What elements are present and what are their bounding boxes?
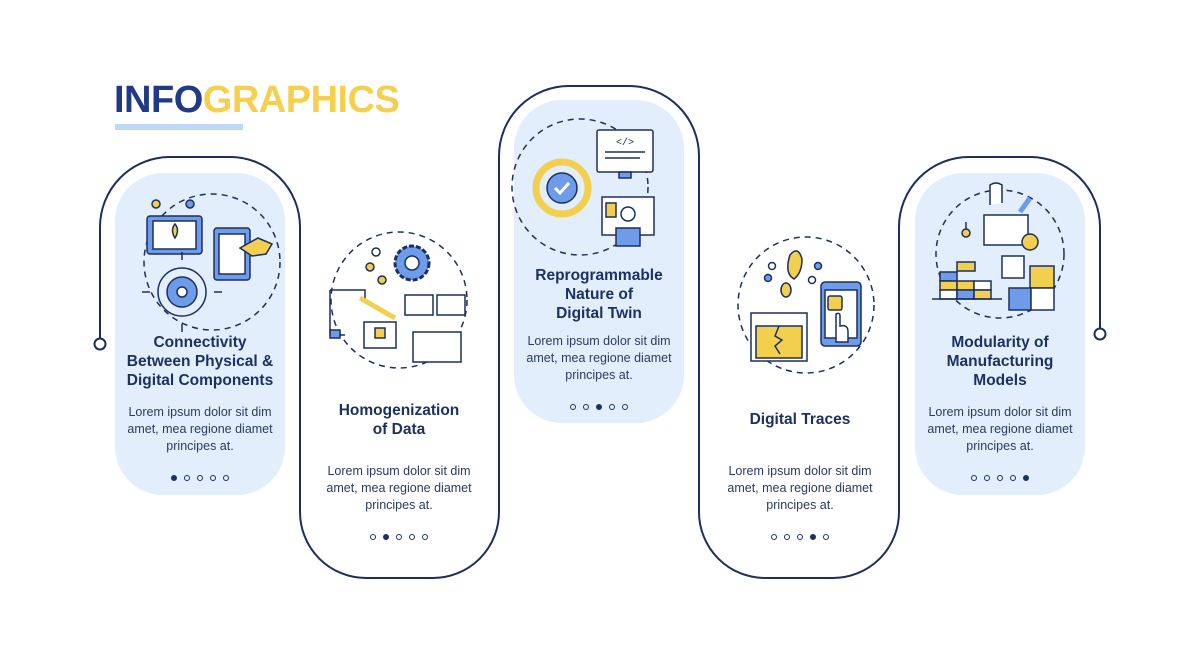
body 2: Lorem ipsum dolor sit dim — [327, 464, 471, 478]
heading 3: Nature of — [565, 286, 633, 303]
heading 5: Modularity of — [951, 334, 1049, 351]
body 1: Lorem ipsum dolor sit dim — [128, 405, 272, 419]
body 1: principes at. — [166, 439, 234, 453]
title underline — [115, 124, 243, 130]
panel 4 text — [727, 411, 873, 540]
body 4: amet, mea regione diamet — [727, 481, 873, 495]
heading 5: Models — [973, 372, 1027, 389]
heading 5: Manufacturing — [947, 353, 1053, 370]
heading 1: Connectivity — [153, 334, 246, 351]
icon: reprogrammable: </> — [616, 137, 634, 149]
end node — [1094, 328, 1106, 340]
panel 1 fill — [115, 173, 285, 495]
panel 5 fill — [915, 173, 1085, 495]
panel 2 text — [326, 402, 472, 540]
heading 2: Homogenization — [339, 402, 459, 419]
icon: modularity — [932, 183, 1064, 318]
body 2: principes at. — [365, 498, 433, 512]
body 5 — [927, 405, 1073, 453]
heading 3 — [535, 267, 663, 322]
body 4: principes at. — [766, 498, 834, 512]
start node — [94, 338, 106, 350]
heading 1 — [127, 334, 273, 389]
body 1 — [127, 405, 273, 453]
body 2: amet, mea regione diamet — [326, 481, 472, 495]
icon: connectivity — [142, 194, 280, 332]
panel 3 text — [526, 267, 672, 410]
body 3: Lorem ipsum dolor sit dim — [527, 334, 671, 348]
body 3: amet, mea regione diamet — [526, 351, 672, 365]
body 5: amet, mea regione diamet — [927, 422, 1073, 436]
heading 4: Digital Traces — [750, 411, 850, 428]
panel 5 text — [927, 334, 1073, 481]
heading 1: Between Physical & — [127, 353, 273, 370]
body 2 — [326, 464, 472, 512]
dots 2 — [370, 534, 428, 540]
body 5: Lorem ipsum dolor sit dim — [928, 405, 1072, 419]
heading 5 — [947, 334, 1053, 389]
panel 3 fill — [514, 100, 684, 423]
icon: homogenization — [330, 232, 467, 368]
body 3: principes at. — [565, 368, 633, 382]
body 3 — [526, 334, 672, 382]
body 5: principes at. — [966, 439, 1034, 453]
heading 3: Digital Twin — [556, 305, 642, 322]
heading 2: of Data — [373, 421, 425, 438]
dots 4 — [771, 534, 829, 540]
body 1: amet, mea regione diamet — [127, 422, 273, 436]
body 4 — [727, 464, 873, 512]
heading 1: Digital Components — [127, 372, 273, 389]
title: INFOGRAPHICS — [114, 79, 399, 121]
connecting outline — [100, 86, 1100, 578]
icon: digital traces — [738, 237, 874, 373]
dots 5 — [971, 475, 1029, 481]
icon: reprogrammable — [512, 119, 654, 255]
heading 3: Reprogrammable — [535, 267, 663, 284]
dots 3 — [570, 404, 628, 410]
panel 1 text — [127, 334, 273, 481]
dots 1 — [171, 475, 229, 481]
body 4: Lorem ipsum dolor sit dim — [728, 464, 872, 478]
heading 2 — [339, 402, 459, 438]
